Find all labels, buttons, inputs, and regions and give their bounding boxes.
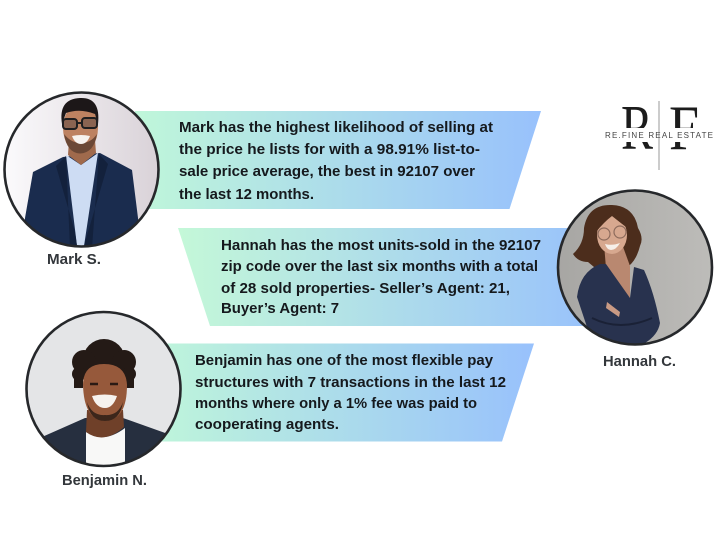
banner: Mark xyxy=(135,111,541,209)
neck xyxy=(604,244,630,298)
stubble xyxy=(64,134,97,154)
text: Hannah description: of 28 sold properties- Seller’s Agent: 21, xyxy=(221,280,510,297)
neck xyxy=(86,410,124,437)
text: Hannah description: zip code over the last six months with a total xyxy=(221,258,538,275)
beard xyxy=(87,402,123,421)
hair xyxy=(573,205,642,272)
text: Mark description: the last 12 months. xyxy=(179,186,314,203)
logo: Re.Fine Real Estate: F xyxy=(669,93,699,163)
smile xyxy=(605,243,620,250)
logo: Re.Fine Real Estate: RE.FINE REAL ESTATE xyxy=(605,131,713,140)
banner: Hannah xyxy=(178,228,600,326)
text: Benjamin description: structures with 7 transactions in the last 12 xyxy=(195,374,506,391)
text: Benjamin description: months where only a 1% fee was paid to xyxy=(195,395,477,412)
text: Hannah description: Buyer’s Agent: 7 xyxy=(221,300,339,317)
text: Mark description: Mark has the highest likelihood of selling at xyxy=(179,119,493,136)
glasses xyxy=(63,119,77,129)
neck xyxy=(68,140,96,165)
text: Benjamin description xyxy=(195,352,506,433)
face xyxy=(597,216,627,254)
text: Benjamin description: Benjamin has one of the most flexible pay xyxy=(195,352,494,369)
lapels xyxy=(56,156,77,248)
text: Mark description: the price he lists for with a 98.91% list-to- xyxy=(179,141,480,158)
hair xyxy=(72,339,136,388)
name: Benjamin N.: Benjamin N. xyxy=(62,472,147,489)
name: Hannah C.: Hannah C. xyxy=(603,353,676,370)
portrait: Benjamin xyxy=(26,312,180,470)
glasses xyxy=(598,228,610,240)
logo: Re.Fine Real Estate: R xyxy=(621,93,653,163)
text: Mark description: sale price average, the best in 92107 over xyxy=(179,163,475,180)
face xyxy=(83,364,127,421)
smile xyxy=(92,394,117,408)
portrait: Hannah xyxy=(558,190,712,348)
banner: Benjamin xyxy=(150,344,534,442)
text: Hannah description xyxy=(221,237,541,317)
logo: Re.Fine Real Estate xyxy=(600,93,717,170)
text: Hannah description: Hannah has the most units-sold in the 92107 xyxy=(221,237,541,254)
text: Mark description xyxy=(179,119,493,203)
face xyxy=(63,110,98,143)
eyes xyxy=(90,383,118,385)
blouse xyxy=(577,264,660,348)
hair xyxy=(61,98,98,124)
smile xyxy=(72,135,90,144)
jacket xyxy=(44,418,165,462)
hand xyxy=(606,302,620,317)
text: Benjamin description: cooperating agents. xyxy=(195,416,339,433)
tee xyxy=(86,428,125,465)
shirt xyxy=(66,153,98,246)
portrait: Mark xyxy=(4,92,158,250)
jacket xyxy=(25,153,140,250)
name: Mark S.: Mark S. xyxy=(47,251,101,268)
